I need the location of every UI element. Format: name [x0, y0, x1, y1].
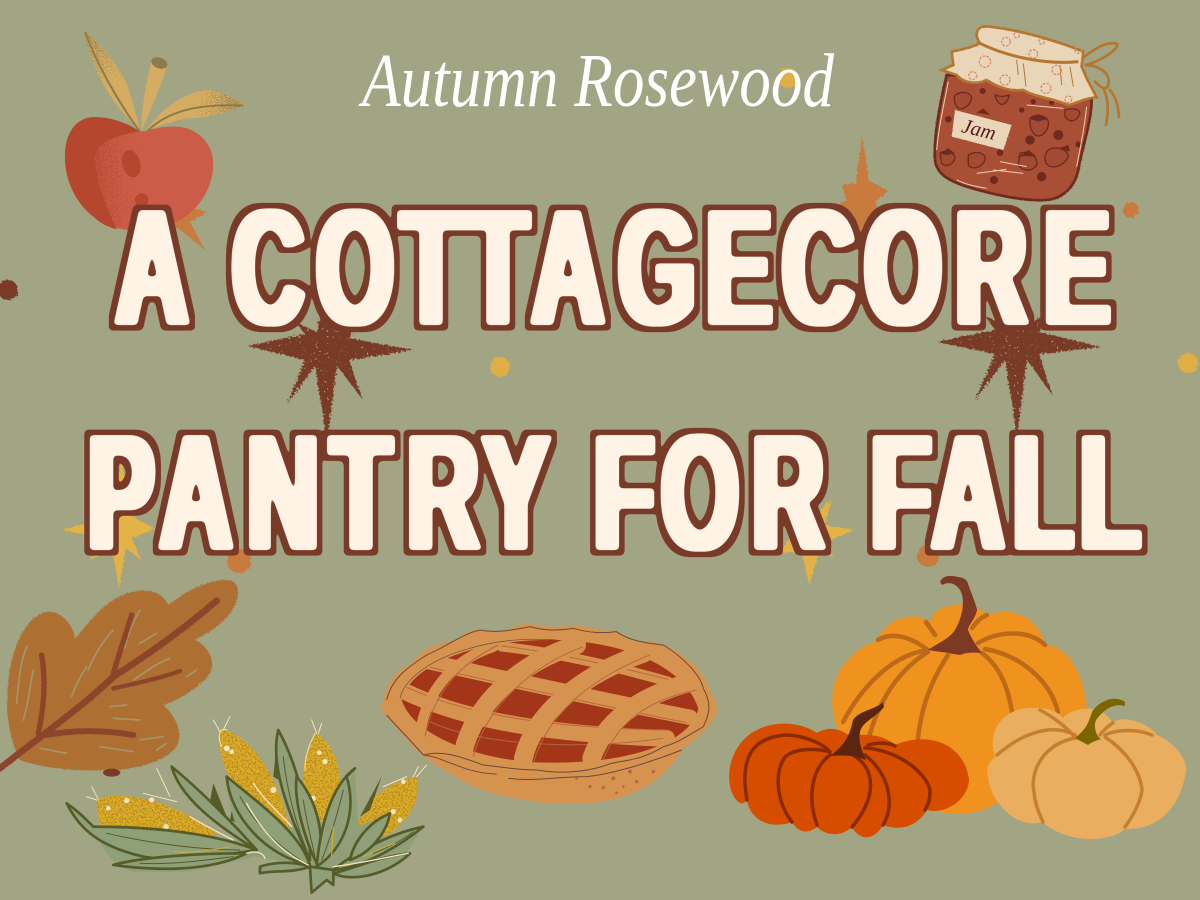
- stem: [1075, 699, 1125, 745]
- stem: [830, 702, 884, 760]
- subtitle: Autumn Rosewood: Autumn Rosewood: [358, 39, 835, 123]
- icon: large orange pumpkin: [832, 576, 1087, 814]
- silk tips: [87, 717, 427, 802]
- icon: dark star left: [247, 280, 413, 442]
- cloth flowers: [969, 32, 1082, 103]
- icon: jam jar: [935, 26, 1119, 200]
- lattice horizontal strips: [405, 647, 690, 738]
- title: [88, 175, 1141, 584]
- icon: red-orange pumpkin: [729, 702, 969, 837]
- ribs: [745, 735, 930, 827]
- crust sprinkles: [575, 770, 655, 794]
- corn ears: [97, 730, 418, 842]
- stem: [928, 576, 982, 655]
- crust rim lines: [387, 627, 709, 779]
- icon: yellow star left: [62, 462, 155, 588]
- icon: orange star behind apple: [150, 205, 208, 250]
- bow: [1080, 43, 1119, 125]
- icon: dark star right: [937, 274, 1101, 436]
- icon: orange star top right: [833, 135, 889, 253]
- jar label: [952, 110, 1012, 150]
- title line 2: PANTRY FOR FALL: [88, 400, 1141, 584]
- lattice vertical strips: [420, 645, 690, 758]
- cloth cover: [942, 26, 1097, 105]
- jar label: Jam: [959, 115, 998, 145]
- husk veins: [107, 757, 413, 864]
- icon: lattice pie: [382, 624, 718, 804]
- title line 1: A COTTAGECORE: [116, 175, 1110, 359]
- icon: apple: [65, 30, 245, 230]
- ribs: [997, 710, 1152, 827]
- crust: [382, 624, 718, 804]
- jar body: [935, 75, 1092, 200]
- dark husk tips: [208, 728, 382, 827]
- icon: corn bundle: [67, 717, 427, 893]
- jar highlights: [937, 82, 1087, 188]
- ribs: [843, 615, 1058, 738]
- icon: pale pumpkin: [987, 699, 1186, 839]
- filling: [402, 640, 698, 763]
- icon: autumn leaf: [0, 580, 238, 777]
- icon: yellow star right: [779, 498, 855, 585]
- husks: [67, 730, 423, 893]
- strawberries and berries: [940, 93, 1080, 170]
- scattered paint dots: [0, 68, 1198, 573]
- husk mass: [93, 768, 423, 880]
